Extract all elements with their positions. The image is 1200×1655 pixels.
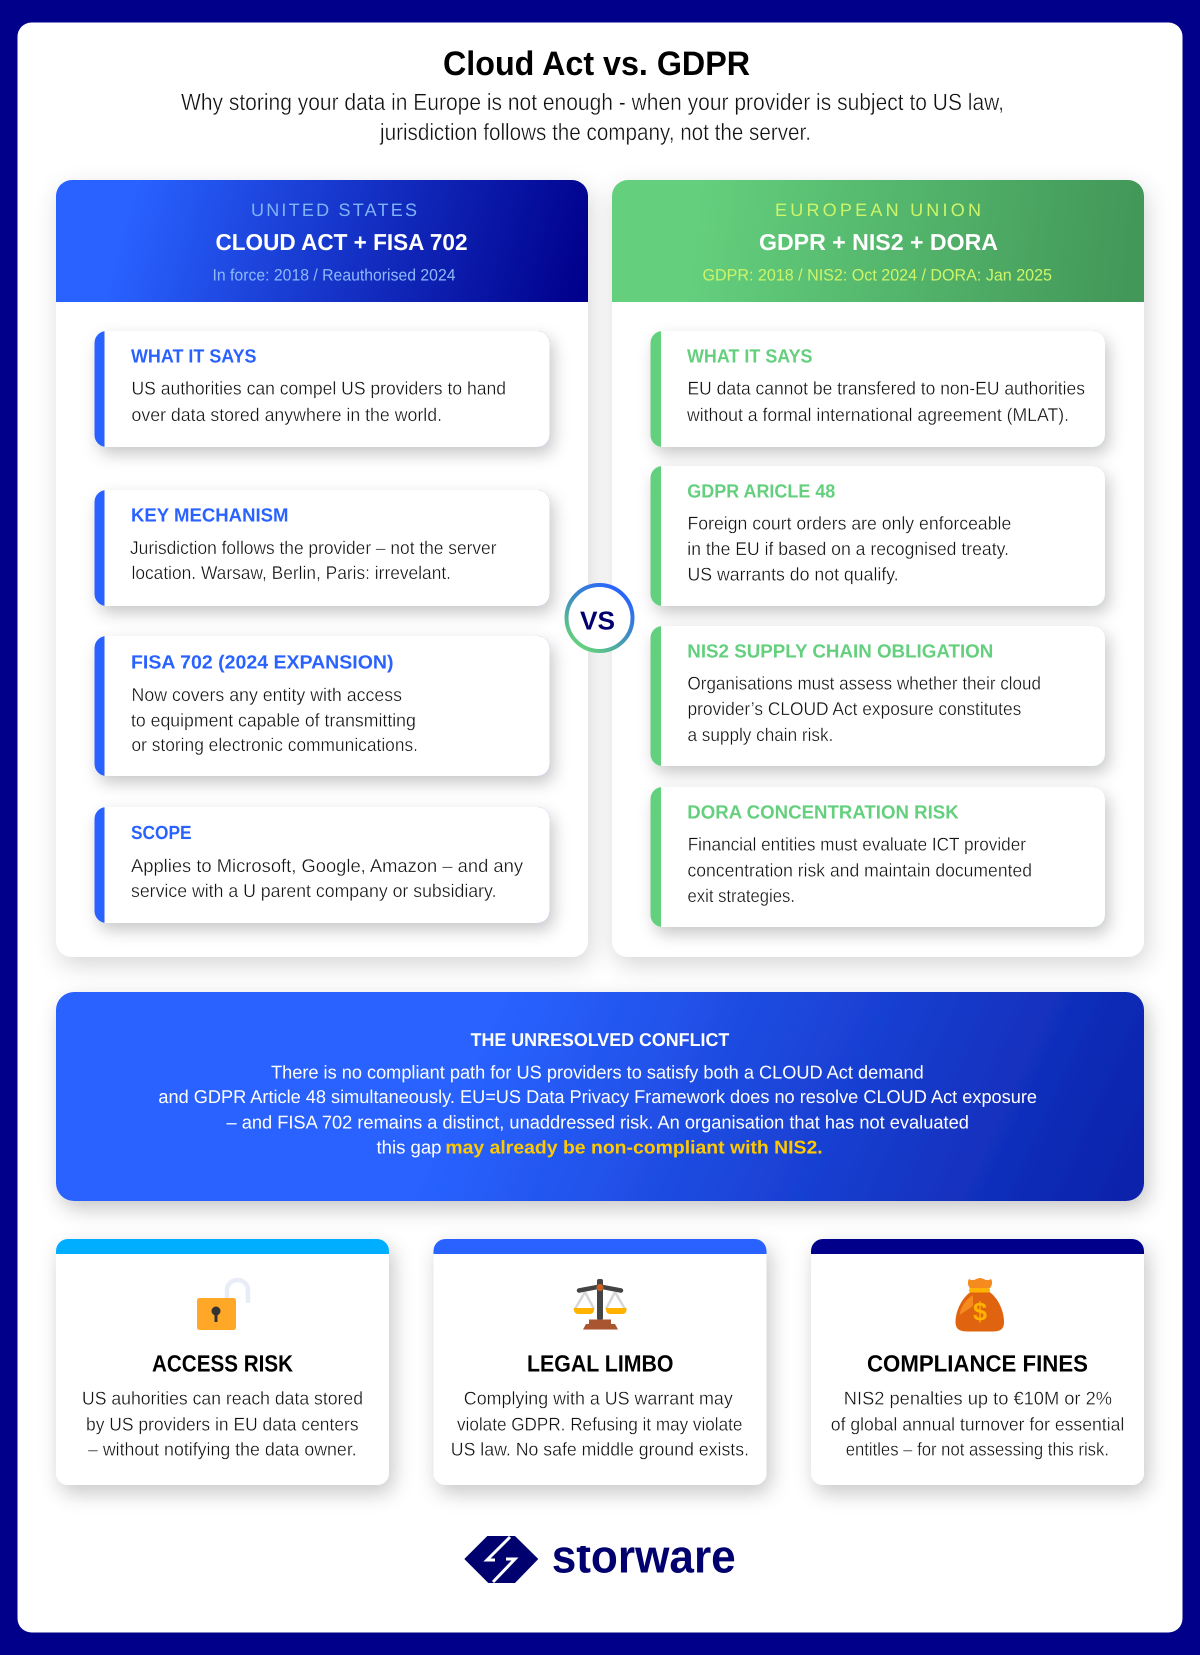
card: what it says (EU) bbox=[650, 331, 1105, 447]
panel: European Union bbox=[612, 180, 1144, 957]
card: scope: Applies to Microsoft, Google, Amazon – and any bbox=[131, 855, 524, 876]
card: key mechanism: KEY MECHANISM bbox=[131, 505, 288, 526]
card: access risk: – without notifying the data owner. bbox=[88, 1438, 357, 1459]
card: FISA 702: to equipment capable of transmitting bbox=[131, 709, 416, 730]
logo: storware: storware bbox=[552, 1530, 736, 1583]
card: DORA concentration risk: DORA CONCENTRATION RISK bbox=[687, 802, 959, 823]
callout: the unresolved conflict: this gap bbox=[376, 1137, 442, 1158]
callout: the unresolved conflict: THE UNRESOLVED CONFLICT bbox=[471, 1029, 730, 1050]
card: scope: SCOPE bbox=[131, 823, 192, 844]
card: FISA 702: FISA 702 (2024 EXPANSION) bbox=[131, 652, 394, 673]
card: key mechanism bbox=[94, 490, 550, 606]
US panel header: CLOUD ACT + FISA 702 bbox=[216, 229, 468, 255]
card: access risk bbox=[56, 1239, 389, 1485]
card: access risk: US auhorities can reach data stored bbox=[82, 1387, 363, 1408]
card: legal limbo: violate GDPR. Refusing it may violate bbox=[457, 1413, 742, 1434]
card: what it says (US): WHAT IT SAYS bbox=[131, 346, 256, 367]
subtitle: jurisdiction follows the company, not the server. bbox=[379, 119, 811, 145]
card: GDPR article 48: in the EU if based on a recognised treaty. bbox=[687, 538, 1009, 559]
EU panel header: GDPR + NIS2 + DORA bbox=[759, 229, 998, 255]
card: scope bbox=[94, 807, 550, 923]
card: access risk: by US providers in EU data centers bbox=[86, 1413, 359, 1434]
icon: scales of justice bbox=[574, 1279, 626, 1330]
logo: storware bbox=[464, 1536, 734, 1583]
subtitle bbox=[181, 89, 1004, 145]
card: key mechanism: location. Warsaw, Berlin, Paris: irrevelant. bbox=[132, 562, 451, 583]
card: DORA concentration risk: concentration risk and maintain documented bbox=[688, 860, 1032, 881]
US panel header bbox=[56, 180, 588, 302]
panel: United States bbox=[56, 180, 588, 957]
callout: the unresolved conflict bbox=[56, 992, 1144, 1201]
card: GDPR article 48: GDPR ARICLE 48 bbox=[687, 482, 835, 503]
card: what it says (US): over data stored anywhere in the world. bbox=[132, 404, 442, 425]
title: Cloud Act vs. GDPR bbox=[443, 45, 750, 83]
callout: the unresolved conflict: and GDPR Article 48 simultaneously. EU=US Data Privacy Framework does no resolve CLOUD Act exposure bbox=[158, 1086, 1037, 1107]
subtitle: Why storing your data in Europe is not enough - when your provider is subject to US law, bbox=[181, 89, 1004, 115]
card: DORA concentration risk bbox=[650, 787, 1105, 927]
card: legal limbo: Complying with a US warrant may bbox=[464, 1387, 734, 1408]
card: compliance fines: NIS2 penalties up to €10M or 2% bbox=[844, 1387, 1112, 1408]
card: NIS2 supply chain: a supply chain risk. bbox=[688, 724, 833, 745]
VS badge bbox=[566, 585, 632, 651]
card: scope: service with a U parent company or subsidiary. bbox=[131, 880, 496, 901]
card: what it says (EU): EU data cannot be transfered to non-EU authorities bbox=[688, 377, 1085, 398]
card: what it says (US) bbox=[94, 331, 550, 447]
card: compliance fines: of global annual turnover for essential bbox=[831, 1413, 1124, 1434]
logo mark bbox=[464, 1536, 538, 1583]
card: FISA 702: or storing electronic communications. bbox=[132, 734, 418, 755]
card: legal limbo: US law. No safe middle ground exists. bbox=[451, 1438, 749, 1459]
callout: the unresolved conflict: There is no compliant path for US providers to satisfy both a CLOUD Act demand bbox=[271, 1061, 924, 1082]
card: what it says (US): US authorities can compel US providers to hand bbox=[132, 377, 506, 398]
card: NIS2 supply chain: NIS2 SUPPLY CHAIN OBLIGATION bbox=[687, 642, 993, 663]
card: FISA 702 bbox=[94, 636, 550, 776]
callout: the unresolved conflict: may already be non-compliant with NIS2. bbox=[445, 1137, 823, 1158]
card: compliance fines bbox=[811, 1239, 1144, 1485]
card: legal limbo bbox=[434, 1239, 766, 1485]
card: NIS2 supply chain: provider’s CLOUD Act exposure constitutes bbox=[688, 698, 1021, 719]
EU panel header: GDPR: 2018 / NIS2: Oct 2024 / DORA: Jan 2025 bbox=[702, 266, 1052, 284]
card: access risk: ACCESS RISK bbox=[152, 1350, 293, 1376]
card: GDPR article 48: US warrants do not qualify. bbox=[688, 563, 899, 584]
card: compliance fines: entitles – for not assessing this risk. bbox=[846, 1438, 1109, 1459]
card: DORA concentration risk: Financial entities must evaluate ICT provider bbox=[688, 834, 1026, 855]
US panel header: UNITED STATES bbox=[251, 200, 417, 220]
VS badge: VS bbox=[580, 605, 615, 635]
card: GDPR article 48: Foreign court orders are only enforceable bbox=[688, 513, 1011, 534]
card: DORA concentration risk: exit strategies. bbox=[688, 885, 795, 906]
card: what it says (EU): without a formal international agreement (MLAT). bbox=[686, 404, 1069, 425]
card: legal limbo: LEGAL LIMBO bbox=[527, 1350, 674, 1376]
US panel header: In force: 2018 / Reauthorised 2024 bbox=[212, 266, 456, 284]
card: FISA 702: Now covers any entity with access bbox=[132, 684, 402, 705]
EU panel header: EUROPEAN UNION bbox=[775, 200, 981, 220]
icon: money bag: $ bbox=[973, 1296, 988, 1326]
icon: open padlock bbox=[197, 1280, 248, 1330]
card: NIS2 supply chain: Organisations must assess whether their cloud bbox=[688, 673, 1041, 694]
card: key mechanism: Jurisdiction follows the provider – not the server bbox=[130, 537, 496, 558]
EU panel header bbox=[612, 180, 1144, 302]
card: compliance fines: COMPLIANCE FINES bbox=[867, 1350, 1088, 1376]
card: what it says (EU): WHAT IT SAYS bbox=[687, 346, 812, 367]
card: GDPR article 48 bbox=[650, 466, 1105, 606]
callout: the unresolved conflict: – and FISA 702 remains a distinct, unaddressed risk. An organisation that has not evaluated bbox=[226, 1111, 969, 1132]
card: NIS2 supply chain bbox=[650, 626, 1105, 766]
icon: money bag bbox=[956, 1278, 1004, 1332]
